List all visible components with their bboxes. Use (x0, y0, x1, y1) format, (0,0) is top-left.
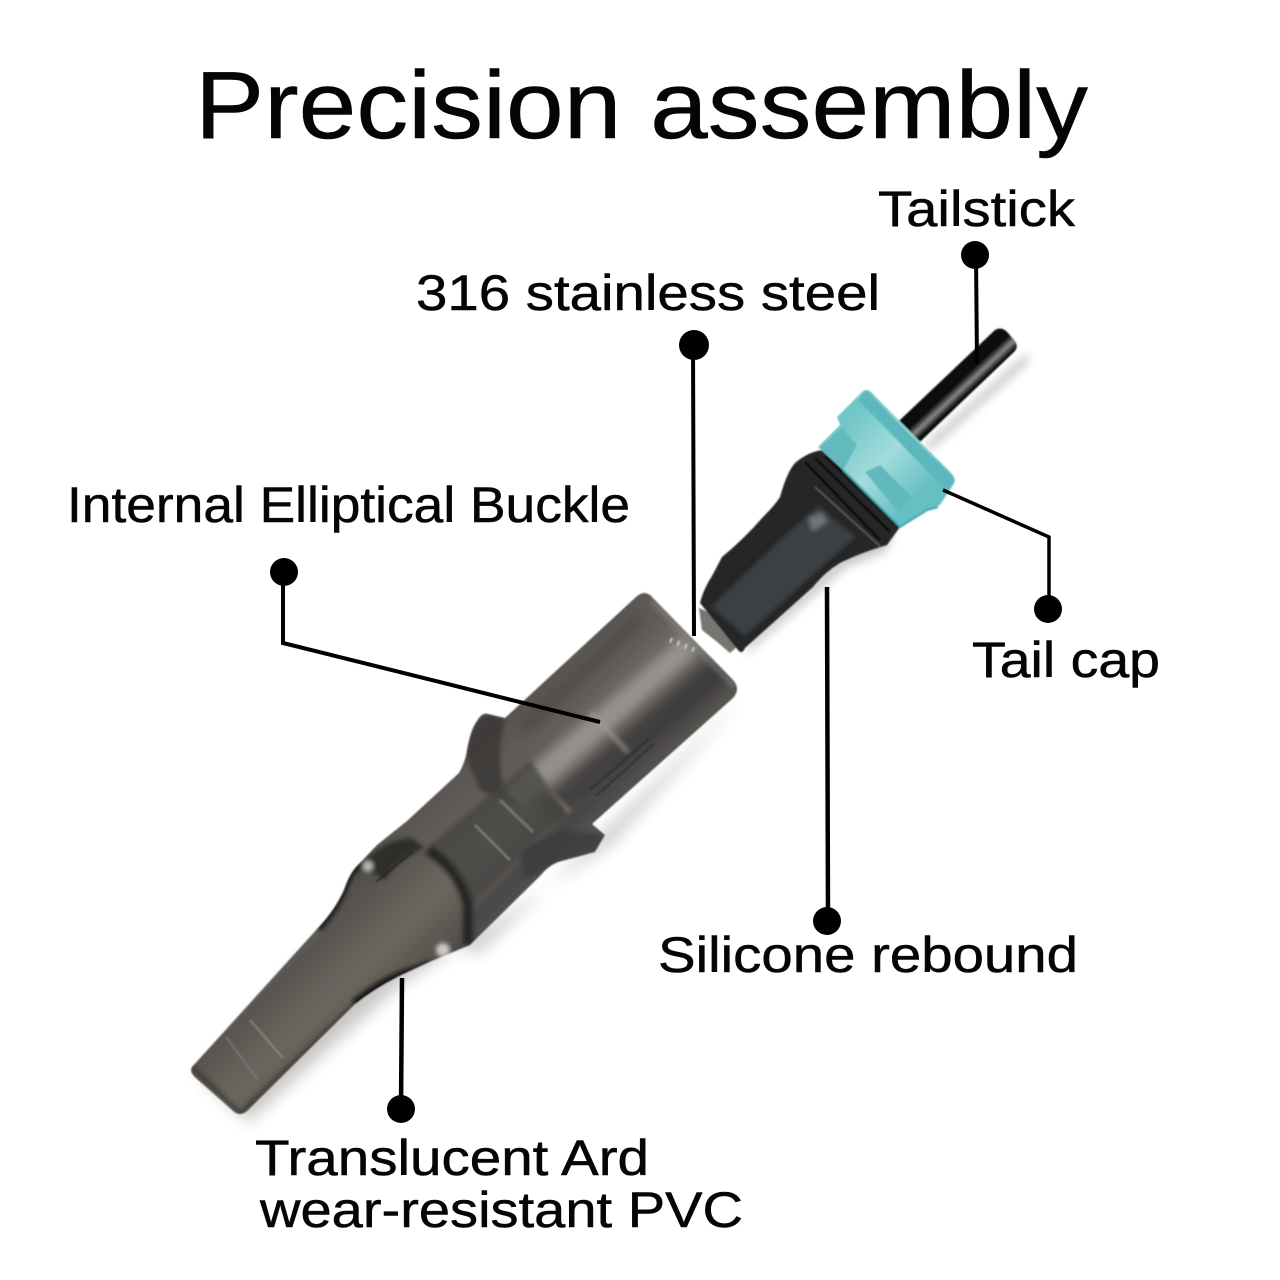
callout: Translucent Ard wear-resistant PVC (255, 978, 743, 1238)
tailstick rod (882, 329, 1030, 459)
callout: 316 stainless steel (416, 265, 880, 636)
fin shading (466, 714, 514, 804)
barrel highlight and dark band (510, 645, 690, 800)
callout: Silicone rebound (658, 587, 1078, 983)
blade edge shadows (318, 862, 362, 928)
callout: Internal Elliptical Buckle: Internal Elliptical Buckle (67, 477, 630, 533)
callout: Internal Elliptical Buckle (67, 477, 630, 722)
callout: Silicone rebound: Silicone rebound (658, 927, 1078, 983)
callout: 316 stainless steel: 316 stainless steel (416, 265, 880, 321)
glints (362, 860, 374, 872)
speckle near rim (670, 640, 695, 650)
tail cap (818, 390, 955, 527)
mid section (430, 760, 565, 905)
callout: Translucent Ard wear-resistant PVC: Translucent Ard (255, 1130, 649, 1186)
blade (190, 850, 475, 1118)
soft drop shadow (200, 695, 745, 1122)
callout: Tailstick (878, 181, 1076, 364)
collar ring (590, 712, 628, 752)
barrel rim (652, 600, 735, 686)
needle cartridge illustration (190, 329, 1030, 1122)
callout: Translucent Ard wear-resistant PVC: wear-resistant PVC (259, 1182, 743, 1238)
silicone neck (699, 608, 738, 653)
tip creases (250, 1020, 283, 1058)
translucent PVC body (191, 593, 737, 1114)
title: Precision assembly (195, 52, 1088, 159)
callout: Tail cap: Tail cap (972, 632, 1160, 688)
callout: Tail cap (943, 490, 1160, 688)
rear silicone body (700, 450, 905, 655)
callout: Tailstick: Tailstick (878, 181, 1076, 237)
